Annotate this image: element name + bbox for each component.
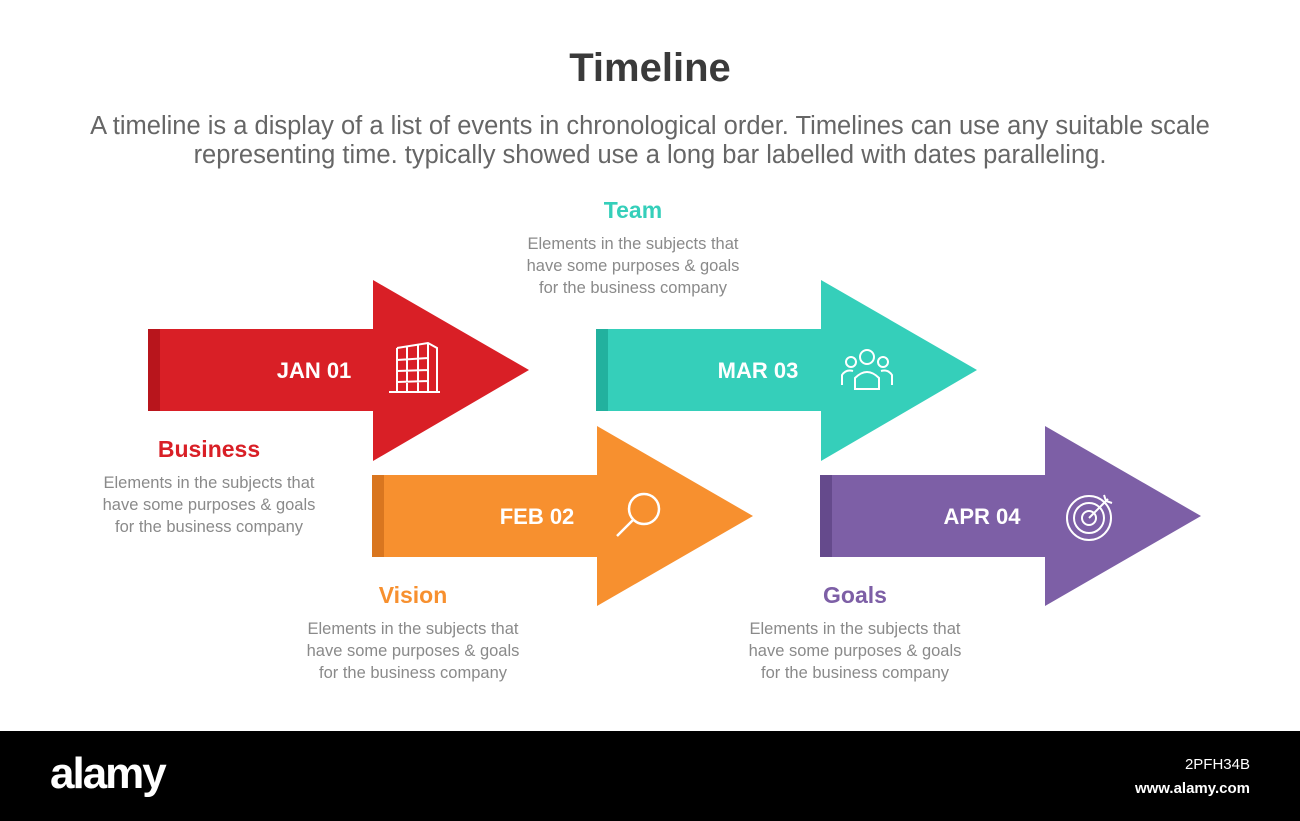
arrow: MAR 03 xyxy=(596,280,977,461)
footer id xyxy=(1135,756,1250,797)
arrow: MAR 03: MAR 03 xyxy=(718,358,798,383)
label: Goals: Elements in the subjects that xyxy=(750,620,960,638)
label: Business: have some purposes & goals xyxy=(103,496,315,514)
footer id: www.alamy.com xyxy=(1135,780,1250,797)
subtitle: representing time. typically showed use a long bar labelled with dates paralleling. xyxy=(194,141,1106,169)
label: Business xyxy=(103,436,315,536)
title: Timeline xyxy=(569,46,731,90)
icon: magnifier xyxy=(617,494,659,536)
icon: target xyxy=(1067,495,1112,540)
label: Goals xyxy=(749,582,961,682)
label: Team xyxy=(527,197,739,297)
icon: team xyxy=(842,350,892,389)
arrow: FEB 02: FEB 02 xyxy=(500,504,574,529)
label: Team: have some purposes & goals xyxy=(527,257,739,275)
subtitle: A timeline is a display of a list of events in chronological order. Timelines can use any suitable scale xyxy=(90,112,1210,140)
footer id: 2PFH34B xyxy=(1185,756,1250,773)
arrow: JAN 01: JAN 01 xyxy=(277,358,351,383)
label: Vision: Vision xyxy=(379,582,447,608)
footer logo: alamy xyxy=(50,749,165,798)
label: Business: for the business company xyxy=(115,518,303,536)
label: Business: Business xyxy=(158,436,260,462)
label: Team: Team xyxy=(604,197,662,223)
arrow: APR 04: APR 04 xyxy=(943,504,1021,529)
label: Vision xyxy=(307,582,519,682)
label: Vision: have some purposes & goals xyxy=(307,642,519,660)
label: Vision: for the business company xyxy=(319,664,507,682)
arrow: JAN 01 xyxy=(148,280,529,461)
icon: building xyxy=(389,343,440,392)
label: Business: Elements in the subjects that xyxy=(104,474,314,492)
subtitle xyxy=(90,112,1210,169)
arrow: APR 04 xyxy=(820,426,1201,606)
arrow: FEB 02 xyxy=(372,426,753,606)
label: Goals: Goals xyxy=(823,582,887,608)
label: Team: for the business company xyxy=(539,279,727,297)
label: Goals: for the business company xyxy=(761,664,949,682)
footer bar xyxy=(0,731,1300,821)
label: Vision: Elements in the subjects that xyxy=(308,620,518,638)
label: Team: Elements in the subjects that xyxy=(528,235,738,253)
label: Goals: have some purposes & goals xyxy=(749,642,961,660)
